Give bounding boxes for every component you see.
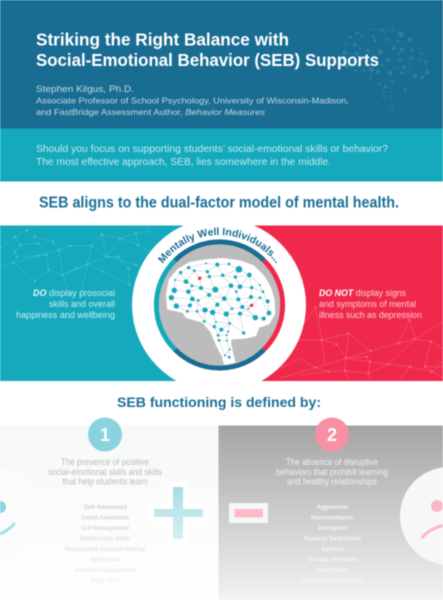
brain network [167, 259, 274, 363]
description: social-emotional skills and skills [48, 466, 162, 477]
skills list: Social Awareness [81, 514, 129, 522]
behaviors list [301, 504, 363, 584]
ring: bottom blue segment [175, 350, 264, 368]
title: Striking the Right Balance with [36, 30, 289, 50]
author credit: Stephen Kilgus, Ph.D. [36, 84, 134, 95]
skills list: Responsible Decision-Making [65, 546, 145, 553]
icon: faint header brain [340, 28, 429, 112]
skills list: Relationship Skills [80, 536, 130, 542]
network pattern left [0, 225, 150, 298]
behaviors list: Aggression [317, 504, 348, 511]
panel: intro band [0, 128, 443, 182]
heading: SEB functioning: SEB functioning is defined by: [117, 394, 321, 410]
number badge 2: 2 [327, 425, 337, 445]
white central circle [132, 218, 306, 392]
number badge 1 [88, 418, 122, 452]
heading: dual-factor model: SEB aligns to the dual-factor model of mental health. [39, 194, 399, 212]
brain badge [153, 226, 286, 372]
icon: plus [149, 482, 208, 544]
panel: dual-factor band [0, 225, 443, 381]
intro text: The most effective approach, SEB, lies somewhere in the middle. [36, 157, 331, 168]
skills list: Study Skills [90, 578, 121, 584]
description: and healthy relationships [287, 476, 377, 487]
number badge 1: 1 [100, 425, 110, 445]
skills list: Academic Engagement [74, 567, 138, 574]
panel: absence of disruptive behaviors [218, 418, 443, 600]
behaviors list: Somatic Problems [308, 556, 357, 564]
description: The presence of positive [61, 456, 149, 467]
skills list: Self-Awareness [84, 504, 127, 511]
behaviors list: Property Destruction [304, 536, 361, 542]
DO NOT text [319, 288, 422, 321]
icon: sad face [400, 467, 443, 565]
description [48, 456, 162, 487]
number badge 2 [315, 418, 349, 452]
author credit: and FastBridge Assessment Author, Behavior Measures [36, 107, 266, 117]
ring: top blue segment [175, 242, 264, 260]
skills list: Motivation [91, 556, 120, 564]
behaviors list: Disruption [318, 525, 347, 532]
behaviors list: Withdrawal/Avoidance [301, 578, 363, 584]
ring: red segment [264, 260, 283, 350]
skills list: Self-Management [81, 525, 130, 532]
description [276, 456, 388, 487]
description: The absence of disruptive [286, 456, 378, 467]
panel: header [0, 0, 443, 128]
curved label: Mentally Well Individuals... [157, 226, 278, 264]
DO text: happiness and wellbeing [16, 310, 115, 321]
gray disc [159, 244, 280, 366]
title: Social-Emotional Behavior (SEB) Supports [36, 50, 379, 70]
behaviors list: Noncompliance [311, 514, 353, 522]
description: that help students learn [62, 476, 148, 487]
intro text: Should you focus on supporting students’ social-emotional skills or behavior? [36, 144, 389, 155]
intro text [36, 144, 389, 168]
author credit [36, 84, 349, 117]
DO NOT text: DO NOT display signs [319, 288, 406, 299]
network pattern right [280, 308, 443, 378]
skills list [65, 504, 145, 584]
DO text: DO display prosocial [33, 288, 115, 299]
title [36, 30, 379, 70]
DO NOT text: illness such as depression [319, 310, 422, 321]
DO NOT text: and symptoms of mental [319, 299, 416, 310]
icon: minus [229, 503, 268, 523]
panel: positive skills [0, 418, 218, 600]
behaviors list: Sadness [321, 546, 344, 553]
author credit: Associate Professor of School Psychology, University of Wisconsin-Madison, [36, 96, 349, 106]
ring: teal segment [156, 260, 175, 350]
behaviors list: Worry/Fear [317, 567, 348, 574]
description: behaviors that prohibit learning [276, 466, 388, 477]
DO text [16, 288, 115, 321]
icon: smiley face [0, 467, 37, 565]
DO text: skills and overall [49, 299, 115, 310]
